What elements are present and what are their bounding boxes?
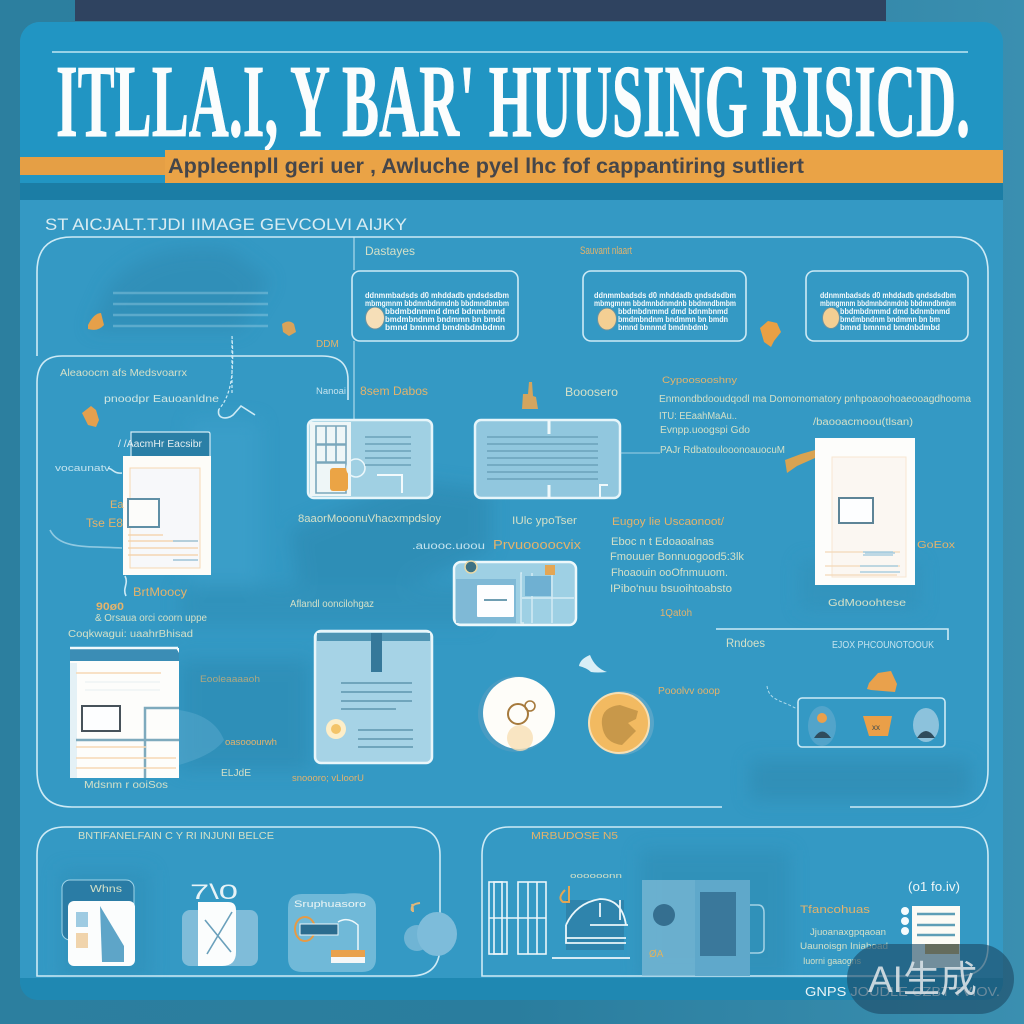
orange mug bbox=[330, 468, 348, 491]
middle right text block: /baooacmoou(tlsan) bbox=[813, 417, 913, 428]
icon: bucket bbox=[863, 716, 892, 736]
doc left labels: Tse E8 bbox=[86, 516, 123, 530]
small crescent bbox=[579, 655, 607, 672]
card 2: ddnmmbadsds d0 mhddadb qndsdsdbm bbox=[594, 291, 736, 300]
label paoalv: Pooolvv ooop bbox=[658, 686, 720, 697]
card 3: mbmgmnm bbdmnbdnmdnb bbdmndbmbm bbox=[820, 299, 956, 308]
center label bbox=[412, 537, 582, 552]
doc left caption: 90ø0 bbox=[96, 601, 124, 613]
doc left caption: & Orsaua orci coorn uppe bbox=[95, 613, 207, 624]
card building bbox=[308, 420, 432, 498]
icon: folder white bbox=[62, 880, 135, 966]
card 3: bmnd bmnmd bmdnbdmbd bbox=[840, 323, 940, 332]
icon: document cross: 7\0 bbox=[190, 881, 238, 904]
center label: .auooc.uoou bbox=[412, 541, 485, 552]
left text block bbox=[60, 368, 220, 405]
left lower label text: Mdsnm r ooiSos bbox=[84, 780, 168, 791]
card 3 bbox=[806, 271, 968, 341]
footer strip bbox=[20, 978, 1003, 1000]
document mid labels bbox=[200, 674, 364, 783]
footer note: GNPS JOUDLE CZBT TVIOV. bbox=[805, 984, 1000, 999]
doc sheet bbox=[123, 456, 211, 575]
top labels bbox=[365, 244, 632, 258]
card 3: bmdmbndnm bndmmn bn bm bbox=[840, 315, 940, 324]
middle right text block bbox=[659, 375, 971, 456]
icon: folder white: Whns bbox=[90, 884, 122, 895]
middle right text block: PAJr RdbatoulooonoauocuM bbox=[660, 445, 785, 456]
label above building bbox=[316, 384, 428, 398]
card 1: ddnmmbadsds d0 mhddadb qndsdsdbm bbox=[365, 291, 509, 300]
rates panel: Rndoes bbox=[726, 636, 765, 650]
document left 1 bbox=[118, 432, 211, 575]
lower right text block: IPibo'nuu bsuoihtoabsto bbox=[610, 583, 732, 595]
orange blob mid bbox=[282, 322, 296, 336]
middle right text block: Cypoosooshny bbox=[662, 375, 738, 385]
orange tab bbox=[545, 565, 555, 575]
icon: tree cluster bbox=[404, 912, 457, 956]
ribbon text: Appleenpll geri uer , Awluche pyel lhc fof cappantiring sutliert bbox=[168, 155, 804, 178]
document mid labels: oasooourwh bbox=[225, 737, 277, 747]
orange stack icon bbox=[522, 382, 538, 409]
header shadow strip bbox=[20, 183, 1003, 200]
faded arc bbox=[179, 710, 224, 765]
document mid labels: snoooro; vLloorU bbox=[292, 773, 364, 783]
subtitle ribbon bbox=[20, 150, 1003, 183]
document mid labels: Eooleaaaaoh bbox=[200, 674, 260, 684]
icons row bbox=[798, 698, 945, 747]
icons row: xx bbox=[872, 723, 880, 732]
panel: building columns bbox=[489, 882, 546, 954]
doc left caption: Coqkwagui: uaahrBhisad bbox=[68, 629, 193, 640]
bottom right frame bbox=[482, 827, 988, 976]
doc tab label: / /AacmHr Eacsibr bbox=[118, 439, 203, 450]
dashed connector bbox=[767, 686, 797, 709]
header band bbox=[20, 22, 1003, 200]
watermark bbox=[847, 944, 1014, 1014]
bottom right heading: MRBUDOSE N5 bbox=[531, 831, 619, 842]
panel: server cabinet: ØA bbox=[649, 949, 664, 960]
doc left labels: vocaunatv bbox=[55, 463, 111, 473]
watermark: AI生成 bbox=[868, 959, 977, 1000]
top-left faded chart bbox=[113, 293, 268, 326]
card 3: ddnmmbadsds d0 mhddadb qndsdsdbm bbox=[820, 291, 956, 300]
doc left labels bbox=[50, 463, 124, 548]
card building caption: 8aaorMooonuVhacxmpdsloy bbox=[298, 513, 442, 525]
card 1: bbdmbdnmmd dmd bdnmbnmd bbox=[385, 307, 505, 316]
panel: server cabinet bbox=[642, 880, 764, 976]
card 2: bbdmbdnmmd dmd bdnmbnmd bbox=[618, 307, 728, 316]
lower right text block bbox=[610, 516, 744, 619]
bottom left heading: BNTIFANELFAIN C Y RI INJUNI BELCE bbox=[78, 831, 274, 842]
left text block: Aleaoocm afs Medsvoarrx bbox=[60, 368, 187, 379]
dashboard card bbox=[454, 561, 576, 625]
label above building: Nanoai bbox=[316, 386, 346, 396]
bottom right text block: (o1 fo.iv) bbox=[908, 879, 960, 894]
squiggle connector bbox=[218, 406, 255, 418]
doc right side label: GoEox bbox=[917, 540, 955, 551]
ribbon left tail bbox=[20, 157, 166, 175]
orange coin circle bbox=[589, 691, 654, 755]
orange hook icon bbox=[412, 903, 420, 912]
coin bbox=[822, 308, 840, 328]
orange blob between cards bbox=[760, 321, 781, 347]
label dma: DDM bbox=[316, 339, 339, 350]
document mid labels: ELJdE bbox=[221, 768, 251, 779]
label sauvant: Sauvant nlaart bbox=[580, 245, 632, 257]
card 2: bmdmbndnm bndmmn bn bmdn bbox=[618, 315, 728, 324]
background shapes bbox=[60, 248, 970, 980]
icon: bubble tree bbox=[913, 708, 939, 742]
lower right text block: Fhoaouin ooOfnmuuom. bbox=[611, 567, 728, 579]
card 2: bmnd bmnmd bmdnbdmb bbox=[618, 323, 708, 332]
icon: storage card bbox=[288, 893, 376, 972]
icon: document cross bbox=[182, 881, 258, 966]
label above building: 8sem Dabos bbox=[360, 384, 428, 398]
lower right text block: Eugoy lie Uscaonoot/ bbox=[612, 516, 725, 528]
center form card bbox=[315, 631, 432, 763]
document right bbox=[815, 438, 915, 585]
card 1: bmdmbndnm bndmmn bn bmdn bbox=[385, 315, 505, 324]
orange house blob bbox=[867, 671, 897, 692]
main frame bbox=[37, 237, 988, 807]
icon: sun tree bbox=[808, 706, 836, 746]
bottom right text block: Iuorni gaaogns bbox=[803, 956, 861, 966]
bottom left frame bbox=[37, 827, 440, 976]
orange tag icon bbox=[785, 450, 815, 473]
orange blob bbox=[82, 406, 99, 427]
connector to text bbox=[620, 452, 660, 454]
coin bbox=[598, 308, 616, 330]
card 2: mbmgmnm bbdmnbdnmdnb bbdmndbmbm bbox=[594, 299, 736, 308]
bottom right text block: Jjuoanaxgpqaoan bbox=[810, 927, 886, 937]
lower right text block: Eboc n t Edoaoalnas bbox=[611, 536, 714, 548]
doc tab bbox=[131, 432, 210, 460]
bottom right text block bbox=[800, 879, 960, 966]
center label: Prvuoooocvix bbox=[493, 537, 582, 552]
card lines caption: IUlc ypoTser bbox=[512, 515, 577, 527]
middle right text block: ITU: EEaahMaAu.. bbox=[659, 411, 737, 422]
caption: Aflandl ooncilohgaz bbox=[290, 599, 374, 610]
label boooseo: Booosero bbox=[565, 385, 618, 399]
doc right caption: GdMooohtese bbox=[828, 598, 907, 609]
lower right text block: 1Qatoh bbox=[660, 608, 692, 619]
document lower left bbox=[70, 648, 179, 778]
middle right text block: Evnpp.uoogspi Gdo bbox=[660, 425, 750, 436]
panel: car sketch bbox=[552, 873, 630, 958]
gear badge bbox=[465, 561, 477, 573]
lower right text block: Fmouuer Bonnuogood5:3lk bbox=[610, 551, 744, 563]
card lines bbox=[475, 420, 620, 498]
label dastaye: Dastayes bbox=[365, 244, 415, 258]
ribbon main bbox=[165, 150, 1003, 183]
middle right text block: Enmondbdooudqodl ma Domomomatory pnhpoaoohoaeooagdhooma bbox=[659, 394, 971, 405]
icon: storage card: Sruphuasoro bbox=[294, 899, 366, 909]
coin bbox=[366, 307, 384, 329]
orange blob left bbox=[88, 313, 104, 330]
rates panel: EJOX PHCOUNOTOOUK bbox=[832, 640, 934, 651]
doc left labels: Ea bbox=[110, 499, 124, 511]
card 2 bbox=[583, 271, 746, 341]
doc left caption: BrtMoocy bbox=[133, 585, 187, 599]
card 1: bmnd bmnmd bmdnbdmbdmn bbox=[385, 323, 505, 332]
card 1 bbox=[352, 271, 518, 341]
bottom right text block: Uaunoisgn Iniaboad bbox=[800, 941, 888, 951]
bottom right text block: Tfancohuas bbox=[800, 904, 871, 916]
card 1: mbmgmnm bbdmnbdnmdnb bbdmndbmbm bbox=[365, 299, 509, 308]
top rule bbox=[52, 51, 968, 53]
section heading: ST AICJALT.TJDI IIMAGE GEVCOLVI AIJKY bbox=[45, 215, 407, 234]
card 3: bbdmbdnmmd dmd bdnmbnmd bbox=[840, 307, 950, 316]
icon: checklist bbox=[901, 906, 960, 968]
top dark bar bbox=[75, 0, 886, 21]
rates panel bbox=[716, 629, 948, 651]
white coin circle bbox=[478, 676, 555, 752]
dashed connector bbox=[219, 336, 233, 409]
window panel bbox=[310, 422, 351, 496]
panel: car sketch: oooooonn bbox=[570, 873, 622, 880]
left text block: pnoodpr Eauoanldne bbox=[104, 394, 220, 405]
doc left caption bbox=[68, 576, 207, 640]
